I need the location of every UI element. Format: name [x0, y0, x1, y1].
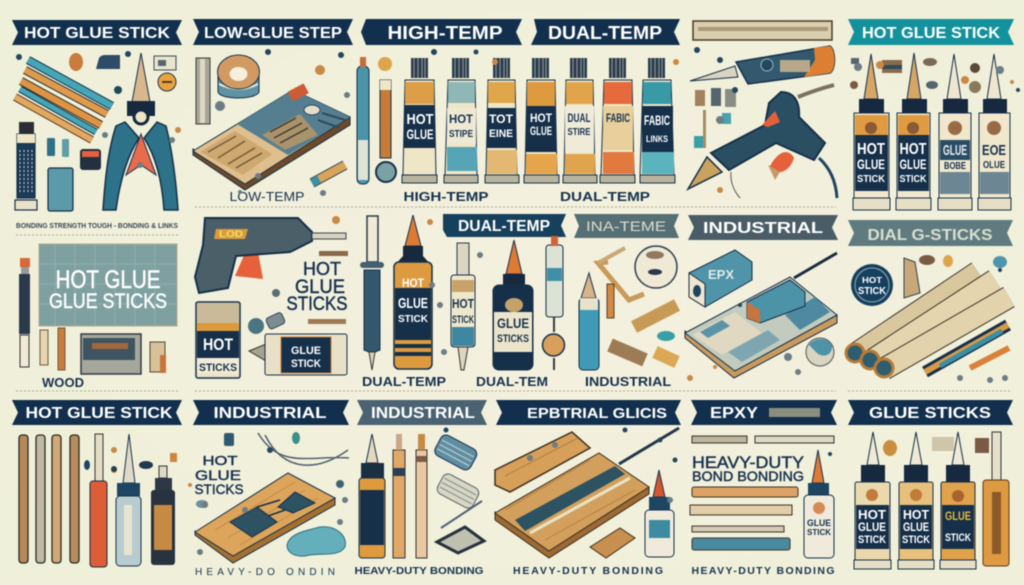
icon: stick badge [851, 264, 893, 306]
syringe: hot stick: HOT [452, 296, 474, 311]
bottle: hot glue stick b [898, 432, 934, 569]
tube: fabic teal: LINKS [646, 134, 668, 144]
icon: small glue pen [690, 46, 834, 84]
icon: teal ball [806, 338, 834, 366]
panel: dial sticks [846, 220, 1013, 377]
bottle: glue bobe [938, 54, 972, 210]
captions: DUAL-TEM [476, 374, 548, 389]
bottle: glue bobe: BOBE [944, 161, 966, 172]
callout: hot glue sign [39, 244, 177, 326]
bottle: hot glue stick 2: STICK [900, 174, 927, 185]
banner: dual-temp: DUAL-TEMP [458, 218, 550, 235]
icon: four glue sticks [19, 435, 79, 563]
text block: hot glue sticks: GLUE [295, 277, 345, 298]
banner row 1: low-glue step: LOW-GLUE STEP [204, 25, 342, 42]
bottle: pale blue [116, 434, 141, 566]
bottle: hot glue stick big: STICK [398, 314, 429, 325]
bottle: hot glue stick 1: GLUE [857, 156, 885, 172]
icon: orange and teal sticks [925, 325, 1009, 372]
banner row 1: dual-temp: DUAL-TEMP [548, 23, 662, 43]
icon: gray glue gun [195, 218, 348, 293]
captions: HIGH-TEMP [404, 189, 489, 204]
sticks with labels [393, 434, 427, 558]
icon: hot sticks box [196, 302, 240, 378]
banner: dual-temp [443, 214, 566, 237]
tube: dual stire: DUAL [568, 111, 590, 125]
bottle: eoe olue [978, 54, 1011, 210]
icon: hot sticks box: STICKS [199, 362, 237, 374]
icon: metal stick [196, 58, 210, 124]
captions: DUAL-TEMP [362, 374, 446, 389]
tube: hot stripe [444, 58, 478, 183]
tube: hot glue: GLUE [406, 126, 434, 142]
banner row 1: teal hot glue stick: HOT GLUE STICK [862, 25, 1000, 42]
bottle: hot glue stick a: STICK [858, 534, 886, 546]
bottle: hot glue stick b: STICK [902, 534, 930, 546]
banner row 1: hot glue stick [12, 20, 182, 45]
panel: top-right glue bottles [850, 53, 1011, 210]
banner row 1: dual-temp [531, 19, 680, 45]
bottle: white glue [645, 470, 674, 557]
bottle: hot glue stick 2: GLUE [900, 156, 926, 172]
caption: heavy-duty bonding: HEAVY-DUTY BONDING [354, 565, 484, 577]
bottle: glue stick [804, 450, 834, 558]
panel: dual-temp bottles [360, 214, 566, 389]
bottle: eoe olue: EOE [982, 142, 1006, 159]
banner row 3: epbtrial glicis: EPBTRIAL GLICIS [527, 405, 667, 422]
text block: hot glue sticks: GLUE [195, 467, 241, 483]
panel: ina-temp wood parts [574, 214, 679, 389]
icon: small parts [694, 85, 834, 148]
tube: dual stire: STIRE [568, 127, 591, 138]
icon: glue stick tube: GLUE [291, 345, 321, 357]
panel: hot glue stick tools [15, 53, 178, 211]
banner row 3: industrial 2 [357, 400, 487, 425]
bottle: hot glue stick b: GLUE [903, 520, 929, 534]
bottle: eoe olue: OLUE [983, 160, 1005, 171]
panel: wood boards and bottle [495, 428, 679, 577]
icon: big board with dark strip [495, 428, 679, 558]
banner row 3: hot glue stick [12, 400, 182, 425]
panel: epxy sticks [690, 436, 834, 577]
bottle: hot glue stick 1 [853, 54, 890, 210]
tube: tot eine: EINE [489, 128, 513, 140]
banner: dial g-sticks: DIAL G-STICKS [868, 227, 993, 244]
icon: orange post [150, 342, 166, 373]
tube: hot olue: HOT [530, 111, 553, 125]
icon: striped blocks [433, 433, 481, 510]
bottle: glue stick: GLUE [807, 518, 831, 528]
icon: assorted blocks [47, 53, 176, 211]
icon: blue box [689, 250, 752, 307]
icon: small parts [850, 58, 981, 93]
panel: industrial bottles [354, 433, 484, 577]
icon: wood sticks [40, 328, 65, 370]
captions [362, 374, 548, 389]
bottle: glue sticks big: GLUE [497, 315, 529, 331]
icon: teal stick [357, 57, 369, 184]
caption: LOW-TEMP [230, 189, 304, 204]
banner: ina-teme: INA-TEME [586, 218, 666, 234]
icon: teal puddle [287, 527, 345, 556]
bottle: glue sticks big: STICKS [497, 333, 529, 345]
tube: hot stripe: STIPE [449, 129, 473, 140]
banner row 1: high-temp: HIGH-TEMP [388, 23, 502, 43]
tube: hot glue [402, 58, 437, 183]
banner row 1: hot glue stick: HOT GLUE STICK [24, 25, 170, 42]
banner row 3: hot glue stick: HOT GLUE STICK [26, 405, 173, 422]
banner row 3: industrial [193, 400, 349, 425]
bottle: orange [359, 434, 385, 558]
banner row 3: industrial: INDUSTRIAL [214, 405, 327, 422]
banner: ina-teme [574, 214, 679, 238]
icon: stick badge: STICK [858, 286, 887, 297]
icon: diagonal glue sticks [15, 60, 112, 140]
panel: high-temp and dual-temp tubes [357, 57, 675, 204]
panel: low-temp board [193, 55, 350, 204]
tube: fabic teal [640, 58, 675, 183]
icon: cream roll [635, 246, 677, 288]
bottle: glue stick c: STICK [945, 532, 971, 544]
icon: tape roll [218, 55, 260, 98]
panel: wood row 2 left [16, 223, 178, 390]
icon: industrial board with block [685, 253, 837, 378]
icon: wood chevrons [598, 248, 677, 362]
icon: gray glue gun: LOD [219, 229, 244, 239]
bottle: small dark [151, 466, 175, 565]
icon: small parts [248, 289, 346, 334]
text block: hot glue sticks [286, 259, 348, 315]
tube: hot olue: GLUE [530, 124, 552, 138]
bottle: hot glue stick b: HOT [903, 507, 929, 522]
banner row 1: high-temp [361, 19, 522, 45]
text block: hot glue sticks: HOT [303, 259, 341, 279]
text block: hot glue sticks: STICKS [194, 481, 244, 497]
icon: wood board with panel [193, 83, 350, 190]
wood plank [693, 21, 832, 40]
bottle: hot glue stick 2 [896, 53, 931, 210]
caption: heavy-duty: HEAVY-DO ONDIN [195, 567, 335, 578]
tube: hot olue [524, 58, 559, 183]
icon: dark panel [81, 334, 141, 374]
icon: syringe [360, 216, 384, 370]
tube: fabic teal: FABIC [644, 112, 670, 128]
bottle: hot glue stick big [394, 215, 432, 369]
icon: orange stick [376, 57, 396, 182]
text block: hot glue sticks [194, 453, 244, 497]
tube: hot stripe: HOT [449, 112, 474, 126]
panel: industrial wood board row 3 [194, 432, 349, 578]
panel: bottom-right glue bottles [854, 432, 1009, 569]
icon: thin rod [441, 501, 482, 528]
text block: hot glue sticks: STICKS [286, 294, 348, 315]
banner: industrial [688, 215, 838, 240]
stick: orange tube [983, 432, 1009, 566]
panel: sticks and bottles row 3 [19, 434, 177, 567]
icon: hot sticks box: HOT [203, 335, 234, 354]
icon: main glue gun [688, 92, 837, 198]
icon: small tube [15, 122, 37, 210]
caption: heavy-duty bonding: HEAVY-DUTY BONDING [692, 565, 834, 577]
tube: dual stire [563, 58, 597, 183]
icon: small parts [196, 432, 344, 508]
bottle: hot glue stick 2: HOT [900, 141, 927, 158]
syringe: hot stick [451, 243, 475, 370]
bottle: hot glue stick big: HOT [402, 276, 425, 290]
bottle: hot glue stick big: GLUE [398, 295, 428, 312]
caption: heavy-duty bonding: HEAVY-DUTY BONDING [513, 565, 663, 577]
captions: DUAL-TEMP [560, 189, 650, 204]
text block: heavy-duty bond bonding: BOND BONDING [692, 468, 804, 484]
banner row 1: low-glue step [193, 19, 353, 45]
banner: dial g-sticks [848, 220, 1013, 246]
callout: hot glue sign: GLUE STICKS [49, 290, 167, 313]
syringe: hot stick: STICK [452, 314, 474, 326]
icon: tall glue tube [19, 258, 30, 367]
blurred small heading: BONDING STRENGTH TOUGH - BONDING & LINKS [16, 223, 178, 230]
bottle: hot glue stick 1: STICK [857, 174, 886, 185]
panel: glue guns [688, 21, 837, 198]
icon: blue box: EPX [708, 267, 734, 282]
callout: hot glue sign: HOT GLUE [56, 266, 160, 294]
icon: small parts [883, 437, 989, 456]
caption: industrial: INDUSTRIAL [585, 374, 671, 389]
captions [404, 189, 650, 204]
bottle: hot glue stick 1: HOT [857, 141, 885, 158]
bottle: glue stick c: GLUE [945, 509, 971, 523]
bottle: hot glue stick a [854, 432, 891, 569]
banner row 3: glue sticks: GLUE STICKS [869, 405, 991, 422]
bottle: hot glue stick a: GLUE [858, 520, 886, 534]
tube: tot eine [485, 58, 519, 183]
icon: small vial and lollipop [542, 236, 564, 370]
icon: small flag and beads [904, 255, 1007, 298]
icon: small parts [84, 453, 177, 473]
banner row 1: teal hot glue stick [848, 19, 1014, 45]
bottle: glue sticks big [493, 240, 533, 370]
icon: wires [258, 433, 349, 465]
bottle: hot glue stick a: HOT [858, 507, 886, 522]
icon: rolled glue cylinders [846, 272, 1009, 377]
panel: gun and hot sticks [195, 218, 348, 378]
icon: wood plank [495, 432, 590, 492]
icon: glue stick tube [249, 334, 347, 375]
icon: top sticks [692, 436, 834, 443]
text block: heavy-duty bond bonding: HEAVY-DUTY [692, 453, 804, 472]
icon: stick badge: HOT [862, 276, 882, 285]
tube: hot glue: HOT [406, 111, 434, 128]
tube: fabic red [600, 58, 635, 183]
banner: industrial: INDUSTRIAL [703, 220, 823, 237]
icon: glue stick tube: STICK [291, 358, 321, 370]
caption: wood: WOOD [42, 375, 84, 390]
bottle: glue stick: STICK [807, 528, 831, 537]
text block: hot glue sticks: HOT [202, 453, 238, 468]
tube: fabic red: FABIC [606, 111, 630, 125]
banner row 3: epbtrial glicis [496, 400, 681, 425]
icon: small wood piece [590, 528, 635, 558]
banner row 3: industrial 2: INDUSTRIAL [371, 405, 475, 422]
icon: small wood stick [312, 165, 345, 183]
bottle: glue bobe: GLUE [943, 142, 967, 159]
icon: lower sticks [690, 487, 798, 550]
text block: heavy-duty bond bonding [692, 453, 804, 484]
banner row 3: epxy [691, 400, 837, 425]
bottle: glue stick c [940, 432, 976, 569]
panel: industrial board [685, 215, 838, 378]
icon: glue nozzle tube [579, 273, 599, 370]
banner row 3: glue sticks [848, 400, 1013, 425]
banner row 3: epxy: EPXY [710, 405, 758, 422]
icon: red driver [90, 434, 107, 567]
icon: wood plank with plate [195, 473, 335, 563]
icon: pliers [103, 53, 178, 210]
tube: tot eine: TOT [489, 112, 514, 126]
icon: dark tray [437, 527, 484, 553]
